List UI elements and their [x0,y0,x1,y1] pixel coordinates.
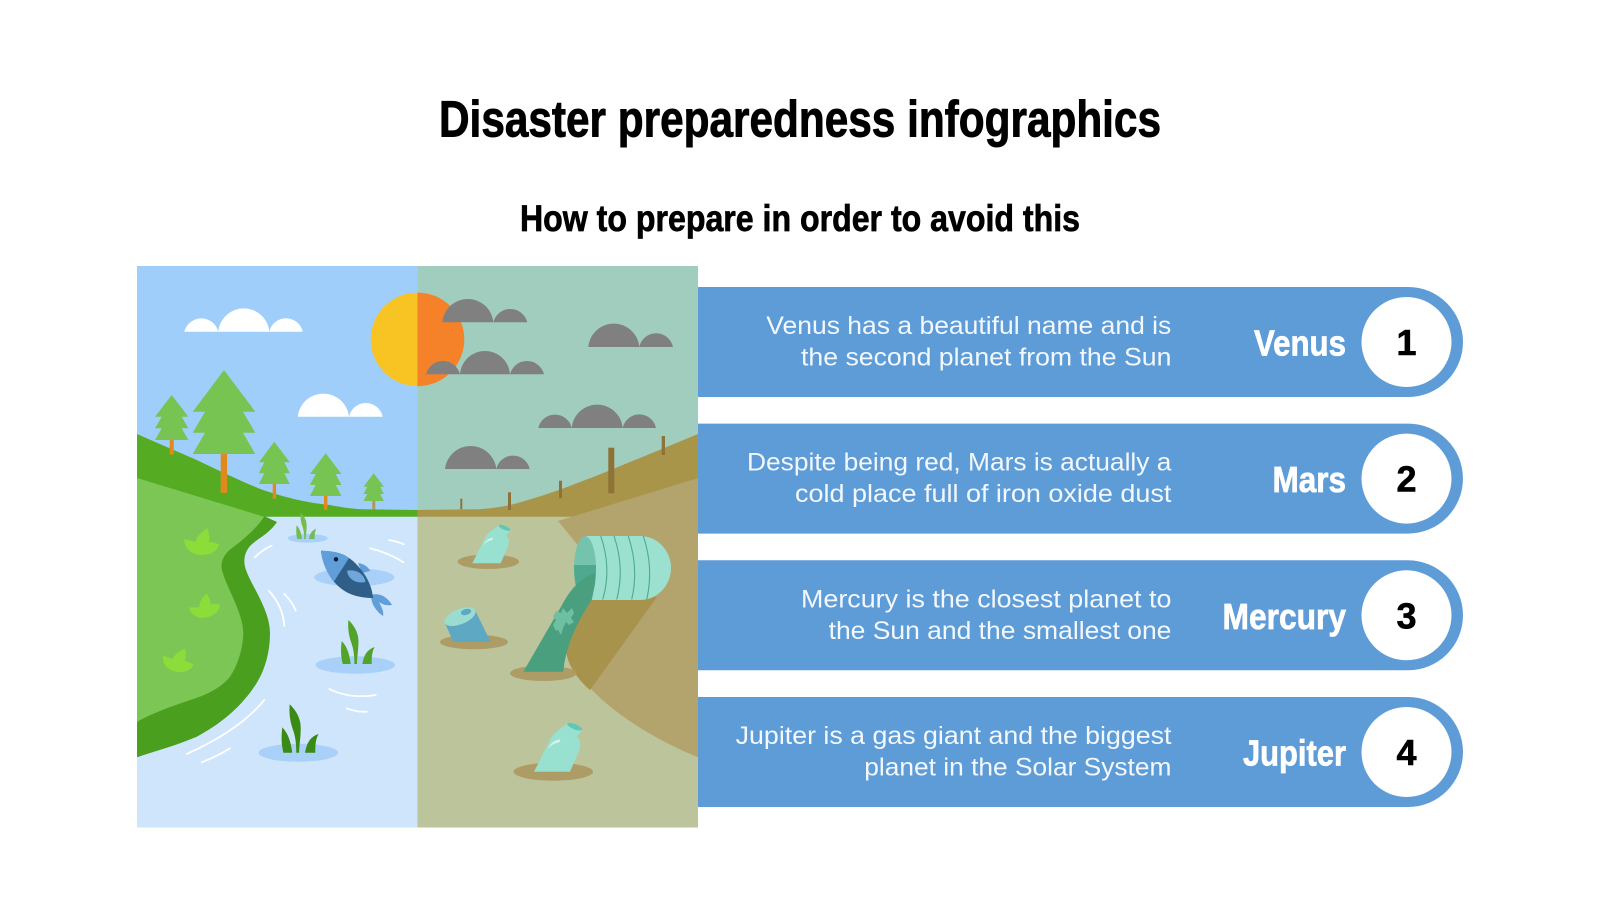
river bank [137,516,277,757]
description [736,722,1171,782]
grey clouds [426,299,673,469]
medium water plant [316,620,395,674]
row 2: Mars [698,424,1463,534]
description: Jupiter is a gas giant and the biggest [736,722,1171,750]
grass leaves [161,528,222,674]
description: the Sun and the smallest one [829,617,1171,645]
paper cup [442,604,491,642]
large water plant [259,704,338,762]
illustration: clean river versus polluted river [137,266,698,828]
label: Jupiter [1243,732,1346,774]
panel: clean side [137,266,418,828]
small bottle [472,523,511,563]
label: Mars [1272,459,1346,500]
label: Mercury [1222,596,1346,637]
row 1: Venus [698,287,1463,397]
white cloud two [298,394,383,417]
number badge [1362,297,1452,387]
subtitle: How to prepare in order to avoid this [520,198,1080,239]
bare hill [418,434,698,517]
description: Despite being red, Mars is actually a [747,449,1171,477]
large bottle [534,721,583,772]
description [766,312,1171,372]
trees [155,370,384,510]
fish [314,551,394,616]
description: Mercury is the closest planet to [801,585,1171,613]
dry bank [558,478,698,757]
small water plant [288,513,328,543]
number badge [1362,707,1452,797]
description [801,585,1171,645]
fence posts [460,436,665,510]
label: Venus [1254,322,1346,364]
number badge [1362,434,1452,524]
polluted outflow [523,573,595,672]
description: cold place full of iron oxide dust [795,480,1171,508]
number badge: 4 [1396,732,1417,773]
water ripples [187,540,404,762]
mud puddles [440,554,593,781]
grass meadow [137,478,264,722]
number badge: 1 [1396,322,1417,363]
title: Disaster preparedness infographics [439,90,1161,148]
bank shadow under pipe [566,597,657,690]
description: Venus has a beautiful name and is [766,312,1171,340]
row 4: Jupiter [698,697,1463,807]
description: the second planet from the Sun [801,344,1171,372]
description: planet in the Solar System [864,754,1171,782]
white cloud one [184,308,303,332]
number badge: 2 [1396,459,1417,500]
row 3: Mercury [698,560,1463,670]
description [747,449,1171,508]
number badge: 3 [1396,595,1417,636]
number badge [1362,570,1452,660]
green hill [137,434,418,517]
panel: polluted side [418,266,698,828]
sun right half [418,293,464,386]
drain pipe [574,536,671,600]
sun left half [371,293,418,386]
